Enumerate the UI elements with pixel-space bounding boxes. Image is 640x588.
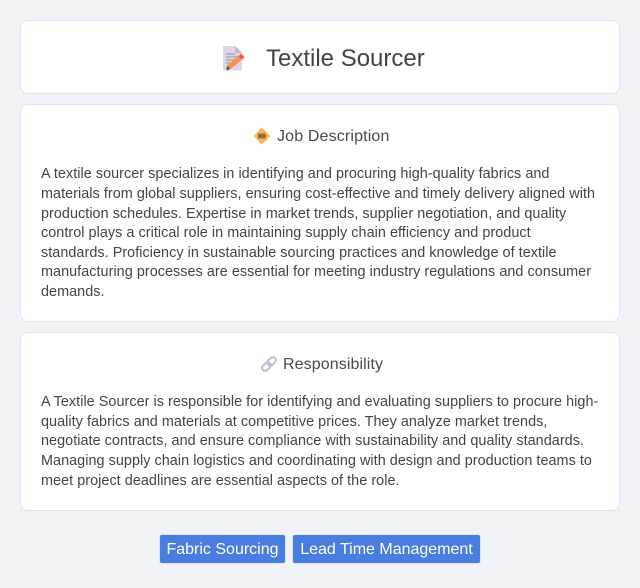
icon: orange diamond sign: [254, 128, 270, 144]
icon: chain link: [261, 356, 277, 372]
text: Managing supply chain logistics and coordinating with design and production teams to: [41, 453, 592, 469]
tag: lead time management: [292, 534, 481, 564]
text: manufacturing processes are essential for meeting industry regulations and consumer: [41, 264, 591, 280]
panel: job description: [20, 104, 620, 322]
panel: title card: [20, 20, 620, 94]
text: A textile sourcer specializes in identifying and procuring high-quality fabrics and: [41, 166, 549, 182]
tag: fabric sourcing: [159, 534, 286, 564]
text: demands.: [41, 284, 105, 300]
text: production schedules. Expertise in market trends, supplier negotiation, and quality: [41, 206, 566, 222]
heading: responsibility: Responsibility: [283, 356, 383, 373]
tag: fabric sourcing: Fabric Sourcing: [166, 541, 279, 558]
text: quality fabrics and materials at competitive prices. They analyze market trends,: [41, 414, 547, 430]
panel: responsibility: [20, 332, 620, 511]
text: control plays a critical role in maintaining supply chain efficiency and product: [41, 225, 531, 241]
text: responsibility body: [41, 394, 598, 489]
text: A Textile Sourcer is responsible for identifying and evaluating suppliers to procure high-: [41, 394, 598, 410]
text: job description body: [41, 166, 595, 300]
tag: lead time management: Lead Time Management: [300, 541, 473, 558]
text: standards. Proficiency in sustainable sourcing practices and knowledge of textile: [41, 245, 557, 261]
title: Textile Sourcer: [266, 45, 425, 72]
icon: document with pencil: [223, 46, 244, 70]
text: meet project deadlines are essential aspects of the role.: [41, 473, 400, 489]
text: materials from global suppliers, ensuring cost-effective and timely delivery aligned with: [41, 186, 595, 202]
text: negotiate contracts, and ensure compliance with sustainability and quality standards.: [41, 433, 584, 449]
heading: job description: Job Description: [277, 128, 390, 145]
